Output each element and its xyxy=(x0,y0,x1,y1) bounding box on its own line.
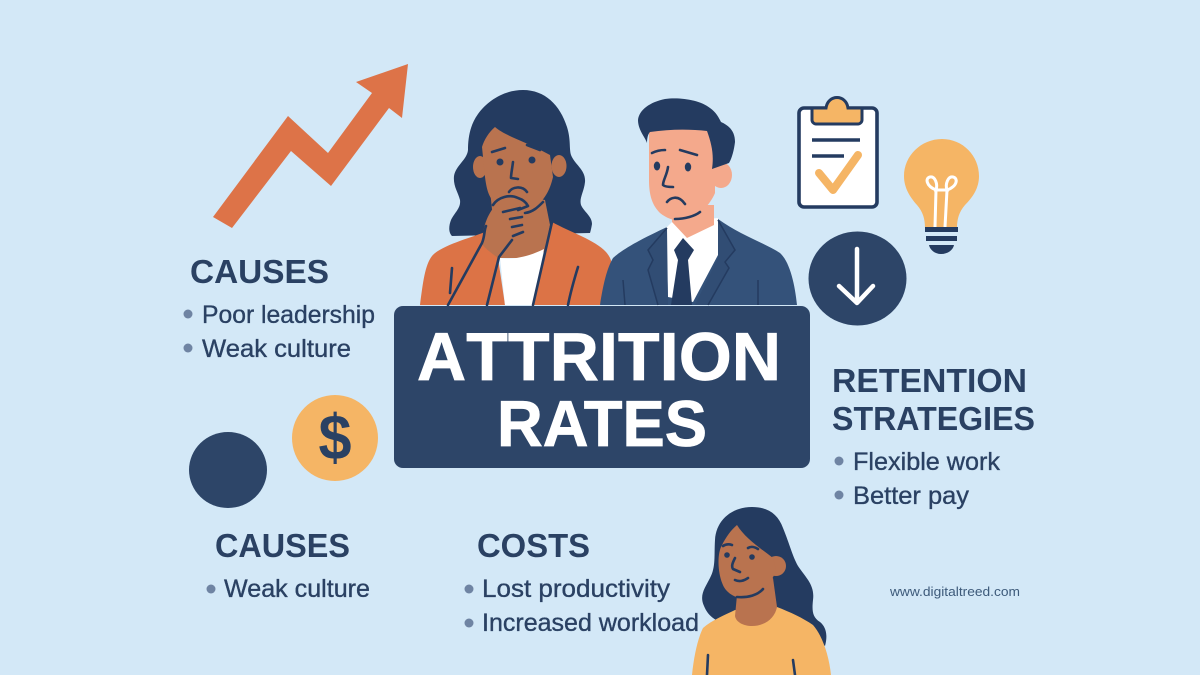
figure: smiling woman xyxy=(692,507,831,675)
text: retention strategies: STRATEGIES xyxy=(832,400,1035,437)
text: causes bottom: CAUSES xyxy=(215,527,350,564)
icon: clipboard xyxy=(799,98,877,207)
lapels xyxy=(648,220,735,305)
ear xyxy=(766,556,786,576)
figure: worried woman xyxy=(420,90,612,305)
text: causes top: CAUSES xyxy=(190,253,329,290)
text: costs: Increased workload xyxy=(482,609,699,637)
hand and jacket lines xyxy=(448,196,578,305)
text: causes top: Weak culture xyxy=(202,335,351,363)
text: causes top: Poor leadership xyxy=(202,301,375,329)
tie xyxy=(671,238,694,305)
details xyxy=(707,544,795,675)
text: causes bottom xyxy=(206,527,370,603)
face xyxy=(482,127,553,212)
text: retention strategies: Better pay xyxy=(853,482,970,510)
face details xyxy=(492,145,543,213)
text: costs xyxy=(464,527,699,637)
hair xyxy=(638,98,735,169)
text: retention strategies: Flexible work xyxy=(853,448,1001,476)
face xyxy=(719,525,776,598)
icon: dollar coin xyxy=(292,395,378,481)
text: causes top xyxy=(184,253,375,363)
title banner: RATES xyxy=(497,387,707,460)
hair xyxy=(702,507,826,646)
face and suit details xyxy=(652,150,700,219)
text: retention strategies: RETENTION xyxy=(832,362,1027,399)
text: retention strategies xyxy=(832,362,1035,510)
text: costs: COSTS xyxy=(477,527,590,564)
icon: down arrow circle xyxy=(808,232,906,326)
neck xyxy=(672,205,714,238)
figure: worried man xyxy=(600,98,797,305)
ears xyxy=(473,156,487,178)
title banner: ATTRITION xyxy=(417,319,781,395)
icon: rising arrow xyxy=(213,64,408,228)
icon: navy circle xyxy=(189,432,267,508)
suit xyxy=(600,219,797,305)
neck xyxy=(735,578,777,626)
hand xyxy=(482,197,529,258)
neck xyxy=(490,190,550,258)
ear xyxy=(710,162,732,188)
shirt xyxy=(500,249,544,305)
title banner xyxy=(394,306,810,468)
jacket xyxy=(420,222,612,305)
icon: dollar coin: $ xyxy=(318,401,352,473)
collar xyxy=(666,218,718,302)
hair xyxy=(449,90,592,236)
icon: light bulb xyxy=(904,139,979,254)
sweater xyxy=(692,607,831,675)
text: causes bottom: Weak culture xyxy=(224,575,370,603)
text: costs: Lost productivity xyxy=(482,575,671,603)
text: website: www.digitaltreed.com xyxy=(889,584,1020,599)
face xyxy=(649,122,715,221)
